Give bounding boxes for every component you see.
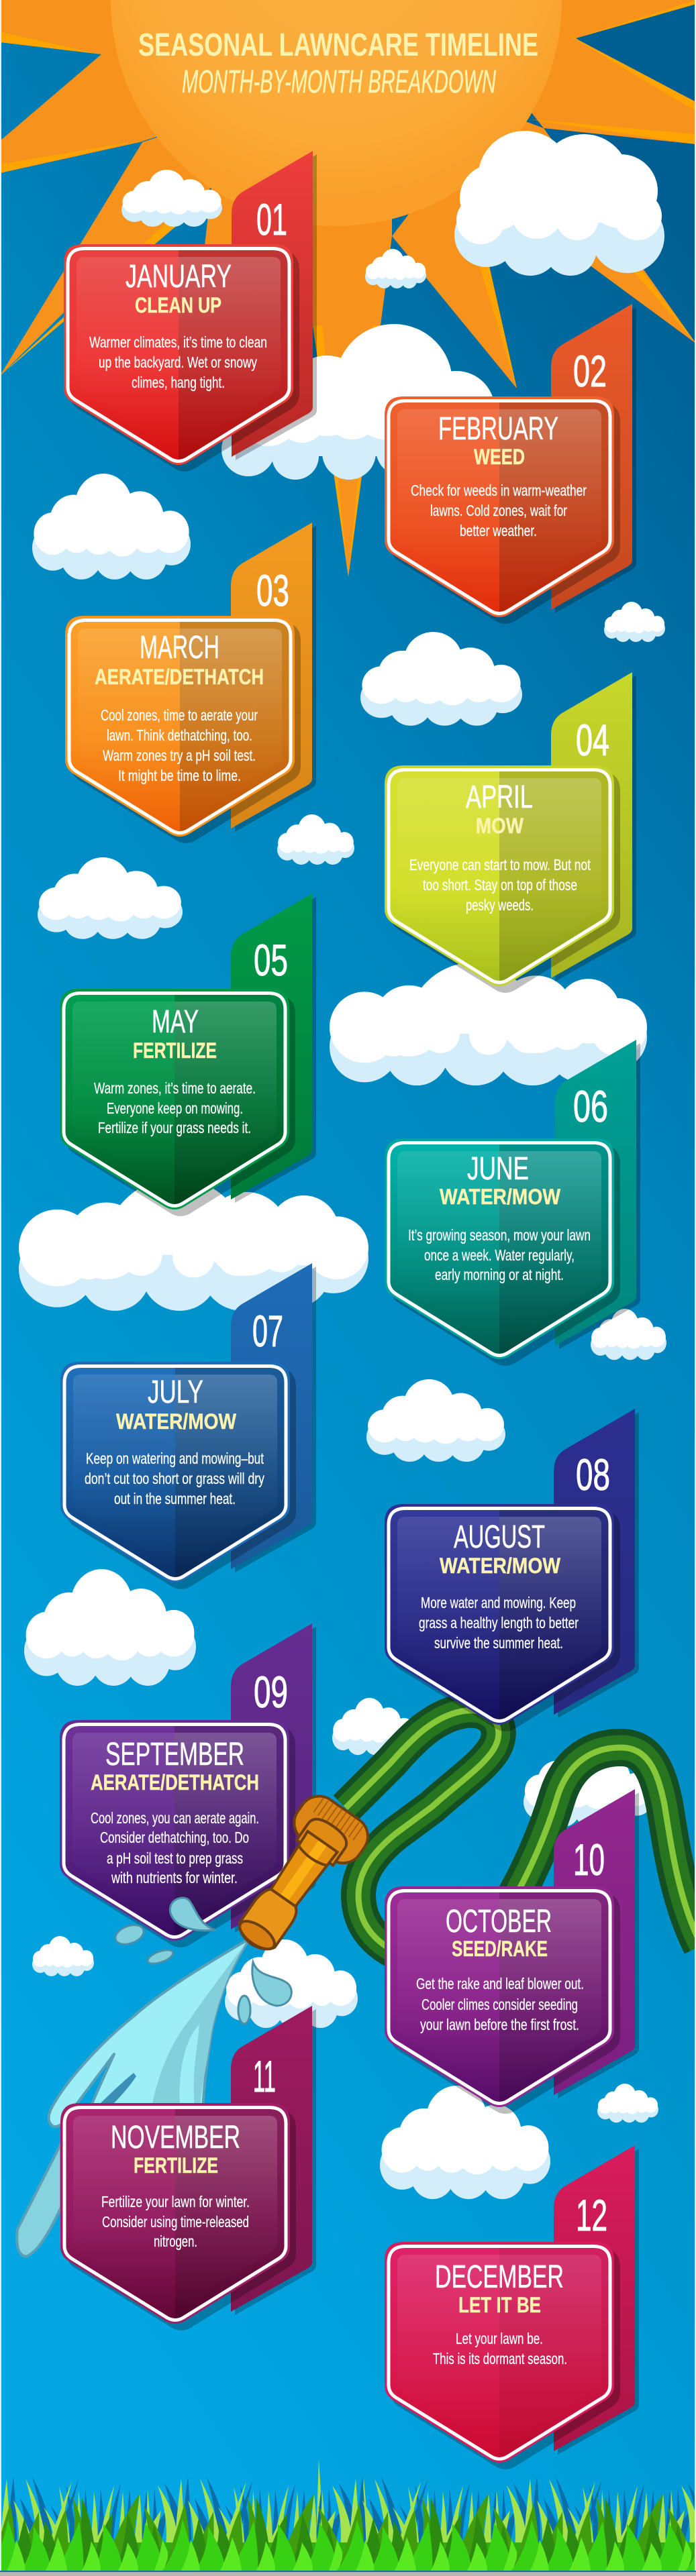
- grass: [0, 2459, 696, 2571]
- number tab 09: 09: [254, 1667, 288, 1717]
- card: November: [60, 2006, 316, 2330]
- task: Aerate/Dethatch: AERATE/DETHATCH: [95, 665, 264, 689]
- month: April: APRIL: [466, 780, 533, 815]
- description: once a week. Water regularly,: [424, 1246, 575, 1264]
- description: Keep on watering and mowing–but: [86, 1450, 264, 1467]
- description: [419, 1594, 579, 1652]
- description: climes, hang tight.: [132, 374, 225, 391]
- description: with nutrients for winter.: [111, 1869, 238, 1886]
- number tab 08: [554, 1409, 639, 1718]
- card: August: [385, 1409, 639, 1731]
- number tab 02: 02: [573, 346, 607, 396]
- water drops: [113, 1898, 291, 2024]
- task: Aerate/Dethatch: AERATE/DETHATCH: [91, 1770, 259, 1794]
- description: [94, 1079, 256, 1136]
- description: [101, 2193, 250, 2250]
- description: better weather.: [460, 522, 537, 539]
- task: Clean up: CLEAN UP: [135, 293, 221, 317]
- description: Let your lawn be.: [456, 2330, 543, 2347]
- description: It’s growing season, mow your lawn: [408, 1226, 591, 1244]
- month: November: NOVEMBER: [111, 2120, 240, 2155]
- description: survive the summer heat.: [434, 1634, 563, 1652]
- description: Everyone keep on mowing.: [107, 1099, 243, 1117]
- card: June: [385, 1040, 640, 1366]
- shield panel: [64, 244, 299, 472]
- description: More water and mowing. Keep: [421, 1594, 576, 1611]
- clouds: [19, 131, 666, 2199]
- description: [408, 1226, 591, 1283]
- month: February: FEBRUARY: [438, 411, 558, 447]
- description: lawn. Think dethatching, too.: [107, 727, 252, 744]
- description: [101, 706, 258, 784]
- description: pesky weeds.: [466, 896, 534, 914]
- number tab 11: 11: [253, 2051, 276, 2101]
- number tab 05: [231, 894, 316, 1203]
- task: Mow: MOW: [476, 814, 524, 838]
- shield panel: [60, 1362, 296, 1589]
- description: [433, 2330, 567, 2367]
- card: February: [385, 304, 636, 624]
- garden hose: [346, 1711, 696, 1955]
- task: Water/Mow: WATER/MOW: [440, 1554, 561, 1578]
- number tab 04: [551, 672, 636, 981]
- number tab 07: 07: [252, 1306, 283, 1356]
- description: your lawn before the first frost.: [420, 2016, 579, 2033]
- description: [411, 482, 587, 539]
- description: out in the summer heat.: [114, 1490, 236, 1507]
- number tab 05: 05: [254, 935, 288, 985]
- task: Water/Mow: WATER/MOW: [440, 1185, 561, 1209]
- description: This is its dormant season.: [433, 2350, 567, 2367]
- description: [409, 856, 591, 914]
- card: March: [65, 523, 316, 843]
- number tab 08: 08: [576, 1450, 610, 1499]
- card: September: [60, 1623, 316, 1947]
- description: Fertilize if your grass needs it.: [98, 1119, 251, 1136]
- description: up the backyard. Wet or snowy: [99, 354, 257, 371]
- description: It might be time to lime.: [118, 767, 241, 784]
- number tab 10: 10: [573, 1835, 605, 1884]
- description: [416, 1975, 584, 2033]
- description: Get the rake and leaf blower out.: [416, 1975, 584, 1992]
- month: August: AUGUST: [454, 1519, 545, 1555]
- shield panel: [60, 2103, 296, 2330]
- month: June: JUNE: [467, 1151, 529, 1187]
- description: early morning or at night.: [435, 1266, 564, 1283]
- hose nozzle: [220, 1788, 376, 1966]
- number tab 06: [555, 1040, 640, 1349]
- number tab 03: 03: [256, 566, 289, 615]
- number tab 12: [554, 2145, 639, 2455]
- description: Warm zones, it’s time to aerate.: [94, 1079, 256, 1097]
- shield panel: [385, 396, 620, 624]
- description: [85, 1450, 264, 1507]
- description: Warmer climates, it’s time to clean: [89, 333, 267, 351]
- description: Cooler climes consider seeding: [421, 1996, 578, 2013]
- number tab 10: [554, 1789, 639, 2098]
- card: October: [385, 1789, 639, 2114]
- sun with rays: [0, 0, 696, 577]
- card: April: [385, 672, 636, 993]
- description: grass a healthy length to better: [419, 1614, 579, 1631]
- description: too short. Stay on top of those: [423, 876, 577, 894]
- description: [89, 333, 267, 391]
- number tab 01: [232, 151, 317, 460]
- subtitle: MONTH-BY-MONTH BREAKDOWN: [182, 64, 496, 100]
- description: nitrogen.: [154, 2233, 197, 2250]
- description: Cool zones, you can aerate again.: [91, 1809, 259, 1827]
- shield panel: [65, 616, 301, 843]
- number tab 03: [231, 523, 316, 832]
- card: January: [64, 151, 317, 472]
- shield panel: [385, 765, 620, 993]
- task: Weed: WEED: [474, 445, 525, 469]
- description: lawns. Cold zones, wait for: [430, 502, 567, 519]
- number tab 07: [231, 1263, 316, 1572]
- description: Check for weeds in warm-weather: [411, 482, 587, 499]
- description: Consider using time-released: [102, 2213, 249, 2231]
- card: May: [60, 894, 316, 1216]
- description: don’t cut too short or grass will dry: [85, 1470, 264, 1487]
- shield panel: [385, 1886, 620, 2114]
- number tab 04: 04: [576, 715, 609, 765]
- number tab 09: [231, 1623, 316, 1933]
- shield panel: [385, 1138, 620, 1366]
- description: Consider dethatching, too. Do: [100, 1829, 249, 1846]
- month: September: SEPTEMBER: [105, 1737, 244, 1772]
- description: Everyone can start to mow. But not: [409, 856, 591, 873]
- number tab 12: 12: [576, 2190, 607, 2240]
- month: March: MARCH: [140, 630, 219, 665]
- shield panel: [60, 989, 295, 1216]
- task: Fertilize: FERTILIZE: [134, 2153, 218, 2178]
- number tab 06: 06: [573, 1081, 608, 1131]
- shield panel: [385, 1504, 620, 1731]
- task: Let it be: LET IT BE: [458, 2293, 541, 2317]
- card: December: [385, 2145, 639, 2469]
- number tab 01: 01: [256, 195, 287, 244]
- description: [91, 1809, 259, 1886]
- task: Fertilize: FERTILIZE: [133, 1038, 217, 1063]
- month: July: JULY: [148, 1375, 203, 1410]
- description: Cool zones, time to aerate your: [101, 706, 258, 724]
- month: May: MAY: [152, 1004, 199, 1040]
- description: a pH soil test to prep grass: [107, 1849, 243, 1867]
- description: Warm zones try a pH soil test.: [103, 747, 256, 764]
- month: December: DECEMBER: [435, 2259, 564, 2295]
- title: SEASONAL LAWNCARE TIMELINE: [138, 28, 538, 63]
- number tab 02: [551, 304, 636, 613]
- task: Water/Mow: WATER/MOW: [116, 1409, 237, 1434]
- task: Seed/Rake: SEED/RAKE: [452, 1937, 548, 1961]
- number tab 11: [231, 2006, 316, 2315]
- month: January: JANUARY: [126, 259, 232, 294]
- shield panel: [60, 1720, 295, 1947]
- water stream: [17, 1938, 250, 2257]
- card: July: [60, 1263, 316, 1589]
- shield panel: [385, 2242, 620, 2469]
- month: October: OCTOBER: [446, 1904, 552, 1939]
- description: Fertilize your lawn for winter.: [101, 2193, 250, 2210]
